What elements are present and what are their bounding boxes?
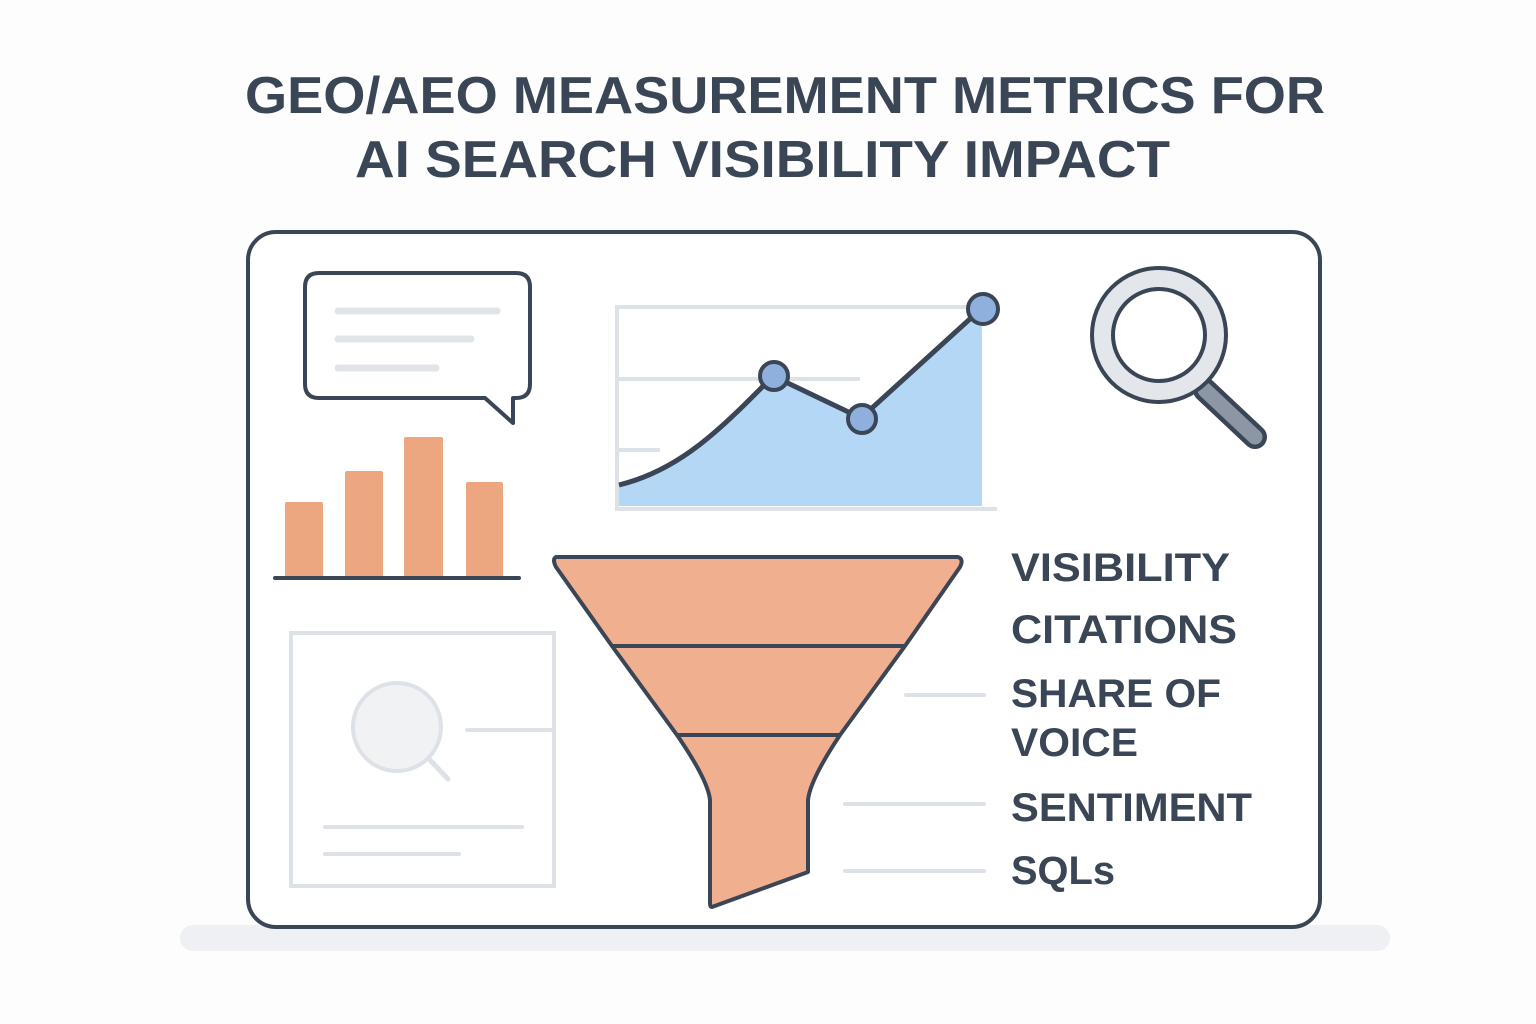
funnel	[554, 557, 962, 907]
icon: magnifying glass	[1103, 279, 1255, 437]
panel: search result card	[291, 633, 554, 886]
leader lines	[845, 695, 984, 871]
title: GEO/AEO MEASUREMENT METRICS FOR	[245, 67, 1325, 125]
metric labels: VISIBILITY	[1011, 546, 1230, 590]
panel: dashboard frame	[248, 232, 1320, 927]
metric labels: SQLs	[1011, 849, 1115, 893]
metric labels: SHARE OF	[1011, 672, 1221, 716]
title	[245, 67, 1325, 189]
title: AI SEARCH VISIBILITY IMPACT	[355, 131, 1170, 189]
line/area chart	[617, 294, 998, 509]
metric labels: VOICE	[1011, 721, 1138, 765]
metric labels: CITATIONS	[1011, 608, 1237, 652]
icon: speech bubble	[305, 273, 530, 423]
metric labels: SENTIMENT	[1011, 786, 1252, 830]
metric labels	[1011, 546, 1252, 893]
bar chart	[275, 437, 519, 578]
shadow under panel	[180, 925, 1390, 951]
